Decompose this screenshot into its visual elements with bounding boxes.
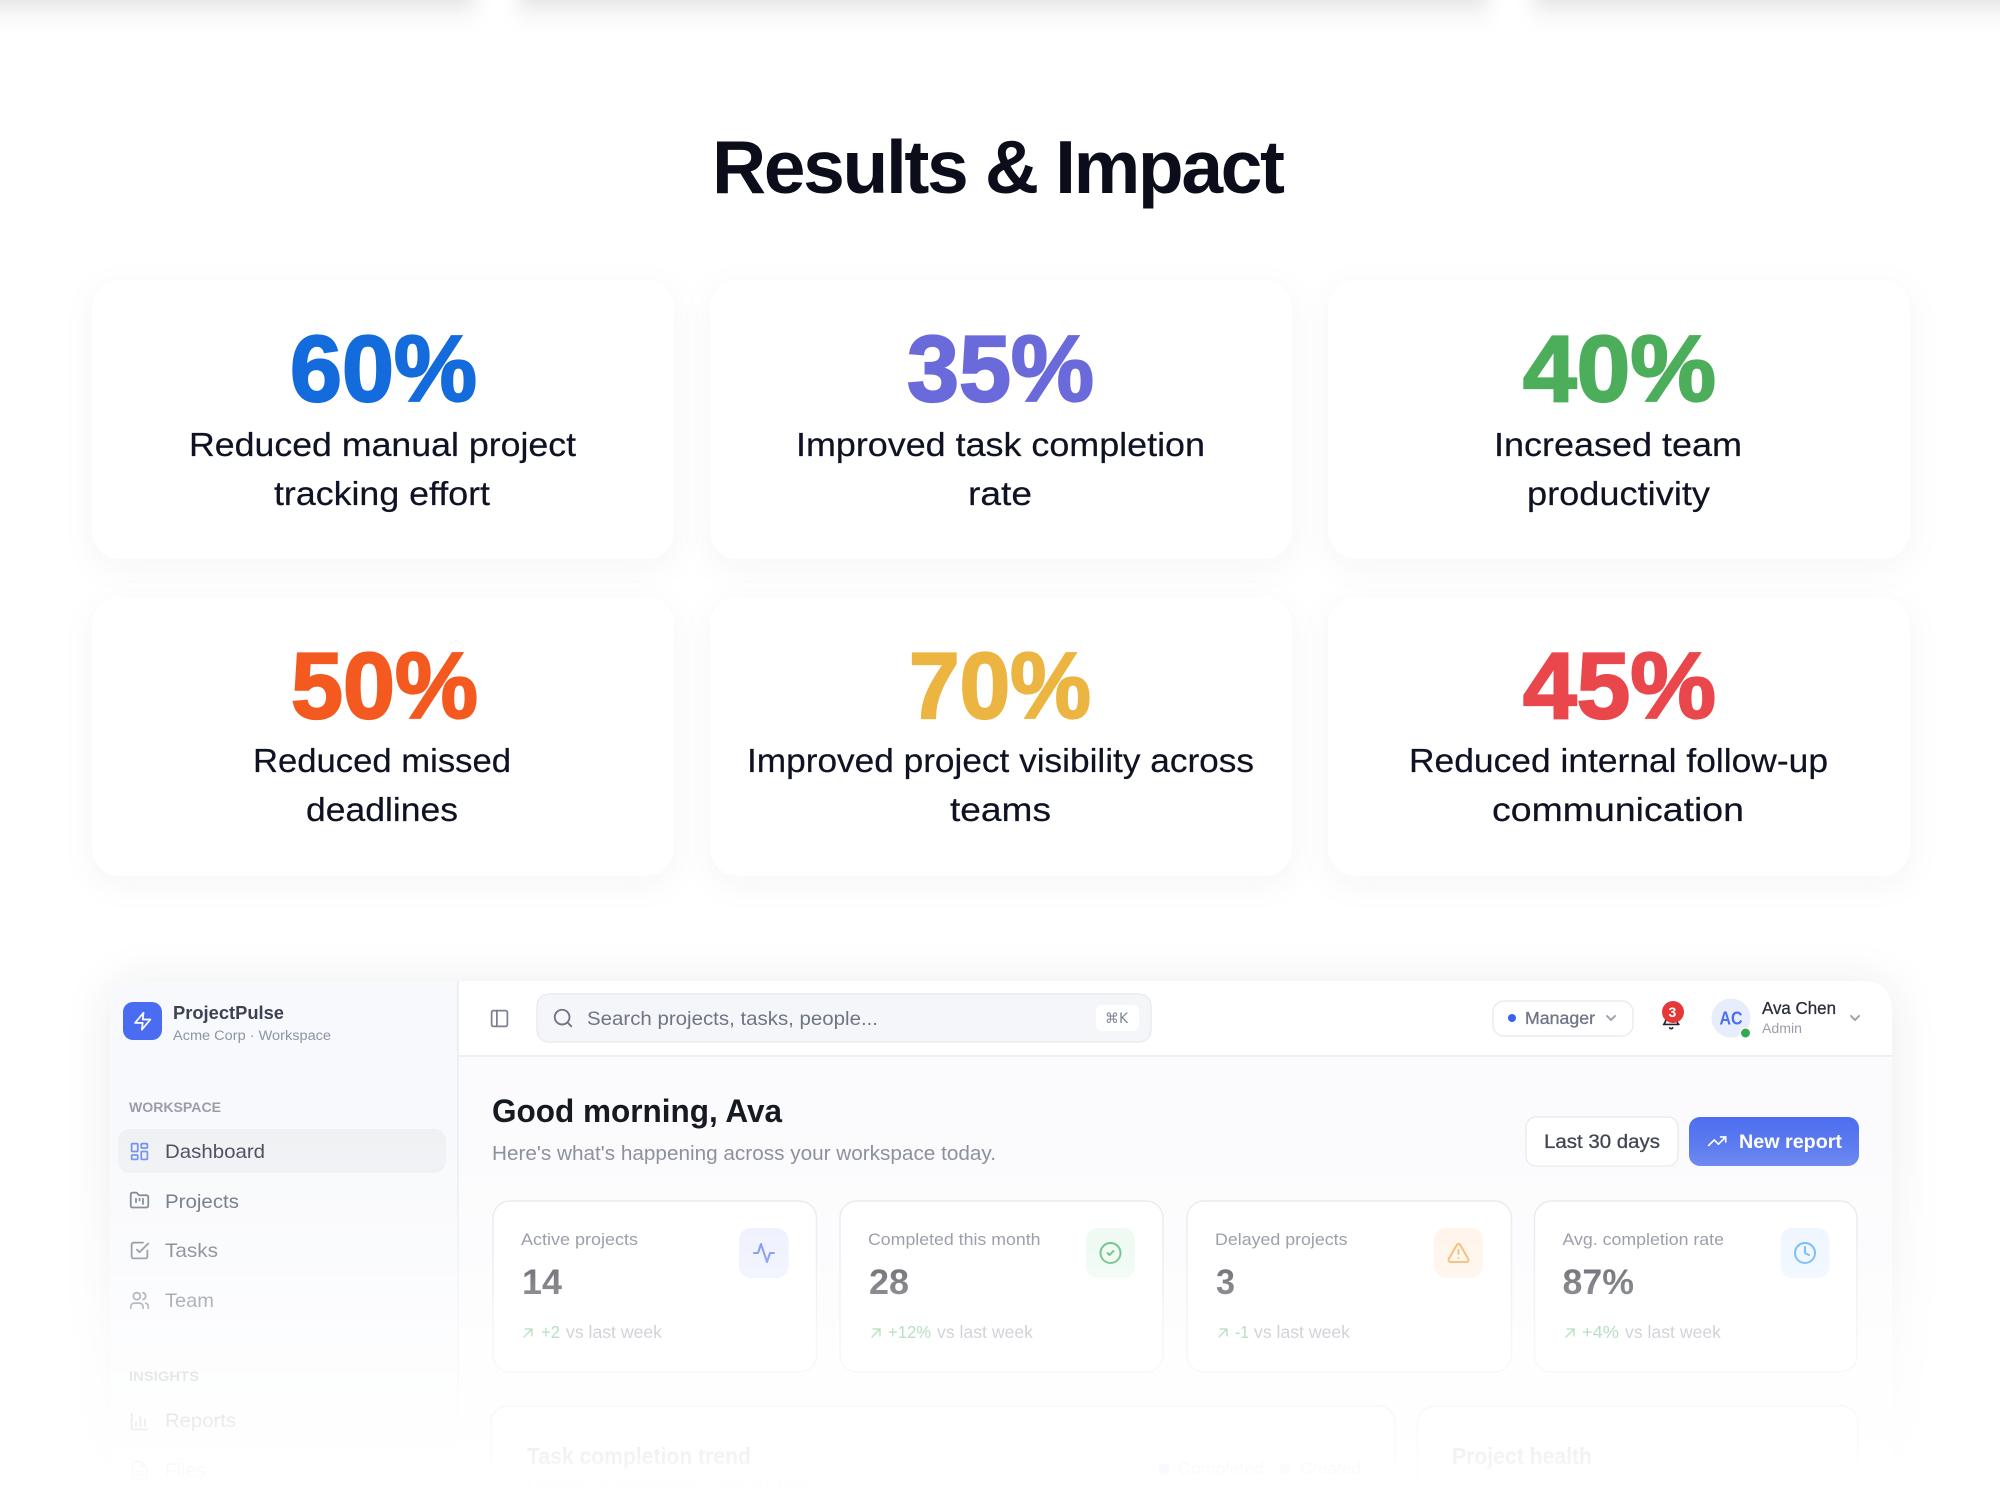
user name: [1762, 998, 1859, 1036]
card: 40 percent: Increased team: [1494, 426, 1742, 463]
stat card: active projects: Active projects: [521, 1230, 638, 1249]
stat card: completed this month: Completed this month: [868, 1230, 1040, 1249]
icon: notification bell: 3: [1668, 1004, 1676, 1020]
card: 60 percent: tracking effort: [274, 475, 490, 512]
card: 45 percent: [1328, 597, 1910, 876]
user avatar: [1712, 998, 1750, 1038]
nav item: tasks: Tasks: [165, 1240, 218, 1262]
stat card: completed this month: vs last week: [937, 1322, 1033, 1342]
card: 45 percent: Reduced internal follow-up: [1409, 742, 1828, 779]
stat card: delayed projects: -1: [1235, 1322, 1249, 1342]
chart card: task completion trend: Created: [1300, 1459, 1361, 1478]
card: 35 percent: Improved task completion: [796, 426, 1205, 463]
nav item: files: Files: [165, 1460, 206, 1482]
card: 60 percent: 60%: [290, 316, 477, 421]
role selector: [1493, 1001, 1633, 1036]
panel: top bar: [459, 981, 1892, 1057]
top edge shadows from cropped section above: [0, 0, 2000, 34]
panel: result cards: [92, 280, 1910, 876]
section label: workspace: WORKSPACE: [129, 1100, 221, 1115]
nav item: projects: Projects: [165, 1191, 239, 1213]
stat card: completed this month: +12%: [888, 1322, 931, 1342]
card: 40 percent: 40%: [1523, 316, 1716, 421]
bottom fade overlay: [0, 1100, 2000, 1493]
stat card: delayed projects: [1187, 1201, 1512, 1372]
icon: notification bell: [1662, 1001, 1684, 1029]
nav item: reports: [132, 1410, 236, 1432]
nav item: tasks: [132, 1240, 218, 1262]
button: last 30 days: [1526, 1117, 1678, 1166]
stat card: active projects: [493, 1201, 816, 1372]
stat card: completed this month: 28: [869, 1263, 909, 1302]
greeting subtext: Here's what's happening across your workspace today.: [492, 1143, 996, 1165]
stat card: active projects: +2: [541, 1322, 560, 1342]
card: 70 percent: 70%: [909, 633, 1091, 738]
card: 50 percent: 50%: [291, 633, 478, 738]
nav item: dashboard: [118, 1129, 446, 1173]
brand name: ProjectPulse: [173, 1003, 284, 1023]
stat card: delayed projects: vs last week: [1254, 1322, 1350, 1342]
chart card: task completion trend: Completed: [1178, 1459, 1264, 1478]
logo: [123, 1002, 162, 1040]
card: 35 percent: rate: [968, 475, 1032, 512]
nav item: team: Team: [165, 1290, 214, 1312]
card: 45 percent: communication: [1492, 791, 1744, 828]
chart card: task completion trend: [491, 1406, 1395, 1493]
user avatar: AC: [1720, 1008, 1742, 1028]
title: Results & Impact: [712, 125, 1285, 209]
search box: Search projects, tasks, people...: [587, 1008, 878, 1030]
chart card: task completion trend: Task completion trend: [527, 1443, 751, 1469]
chart card: project health: [1418, 1406, 1858, 1493]
button: new report: New report: [1739, 1131, 1843, 1153]
user name: Admin: [1762, 1021, 1802, 1036]
card: 50 percent: Reduced missed: [253, 742, 511, 779]
stat card: average completion rate: Avg. completion rate: [1562, 1230, 1724, 1249]
nav item: dashboard: Dashboard: [165, 1141, 265, 1163]
button: last 30 days: Last 30 days: [1544, 1131, 1660, 1153]
user name: Ava Chen: [1762, 998, 1836, 1018]
card: 50 percent: deadlines: [306, 791, 458, 828]
stat card: average completion rate: 87%: [1562, 1263, 1634, 1302]
panel: sidebar: [110, 981, 459, 1493]
stat card: average completion rate: [1534, 1201, 1857, 1372]
nav item: files: [132, 1460, 206, 1482]
stat card: delayed projects: Delayed projects: [1215, 1230, 1348, 1249]
nav item: reports: Reports: [165, 1410, 236, 1432]
stat card: active projects: vs last week: [566, 1322, 662, 1342]
stat card: completed this month: [840, 1201, 1163, 1372]
nav item: projects: [131, 1191, 239, 1213]
card: 40 percent: [1328, 280, 1910, 559]
card: 60 percent: Reduced manual project: [189, 426, 576, 463]
panel: dashboard screenshot: [110, 981, 1892, 1493]
card: 45 percent: 45%: [1523, 633, 1716, 738]
card: 70 percent: Improved project visibility across: [747, 742, 1254, 779]
stat card: average completion rate: vs last week: [1625, 1322, 1721, 1342]
stat card: delayed projects: 3: [1216, 1263, 1235, 1302]
search box: ⌘K: [1105, 1011, 1129, 1027]
greeting heading: Good morning, Ava: [492, 1093, 782, 1129]
role selector: Manager: [1525, 1008, 1595, 1028]
stat card: active projects: 14: [522, 1263, 563, 1302]
button: new report: [1689, 1117, 1859, 1166]
card: 70 percent: teams: [950, 791, 1051, 828]
card: 60 percent: [92, 280, 674, 559]
card: 40 percent: productivity: [1527, 475, 1711, 512]
card: 70 percent: [710, 597, 1292, 876]
stat card: average completion rate: +4%: [1582, 1322, 1619, 1342]
chart card: project health: Project health: [1452, 1443, 1592, 1469]
icon: sidebar toggle: [492, 1011, 507, 1026]
card: 35 percent: [710, 280, 1292, 559]
nav item: team: [131, 1290, 214, 1312]
search box: [537, 994, 1151, 1042]
dashboard frame: [110, 981, 1892, 1493]
card: 35 percent: 35%: [907, 316, 1094, 421]
card: 50 percent: [92, 597, 674, 876]
section label: insights: INSIGHTS: [129, 1369, 199, 1384]
workspace name: Acme Corp · Workspace: [173, 1028, 331, 1043]
